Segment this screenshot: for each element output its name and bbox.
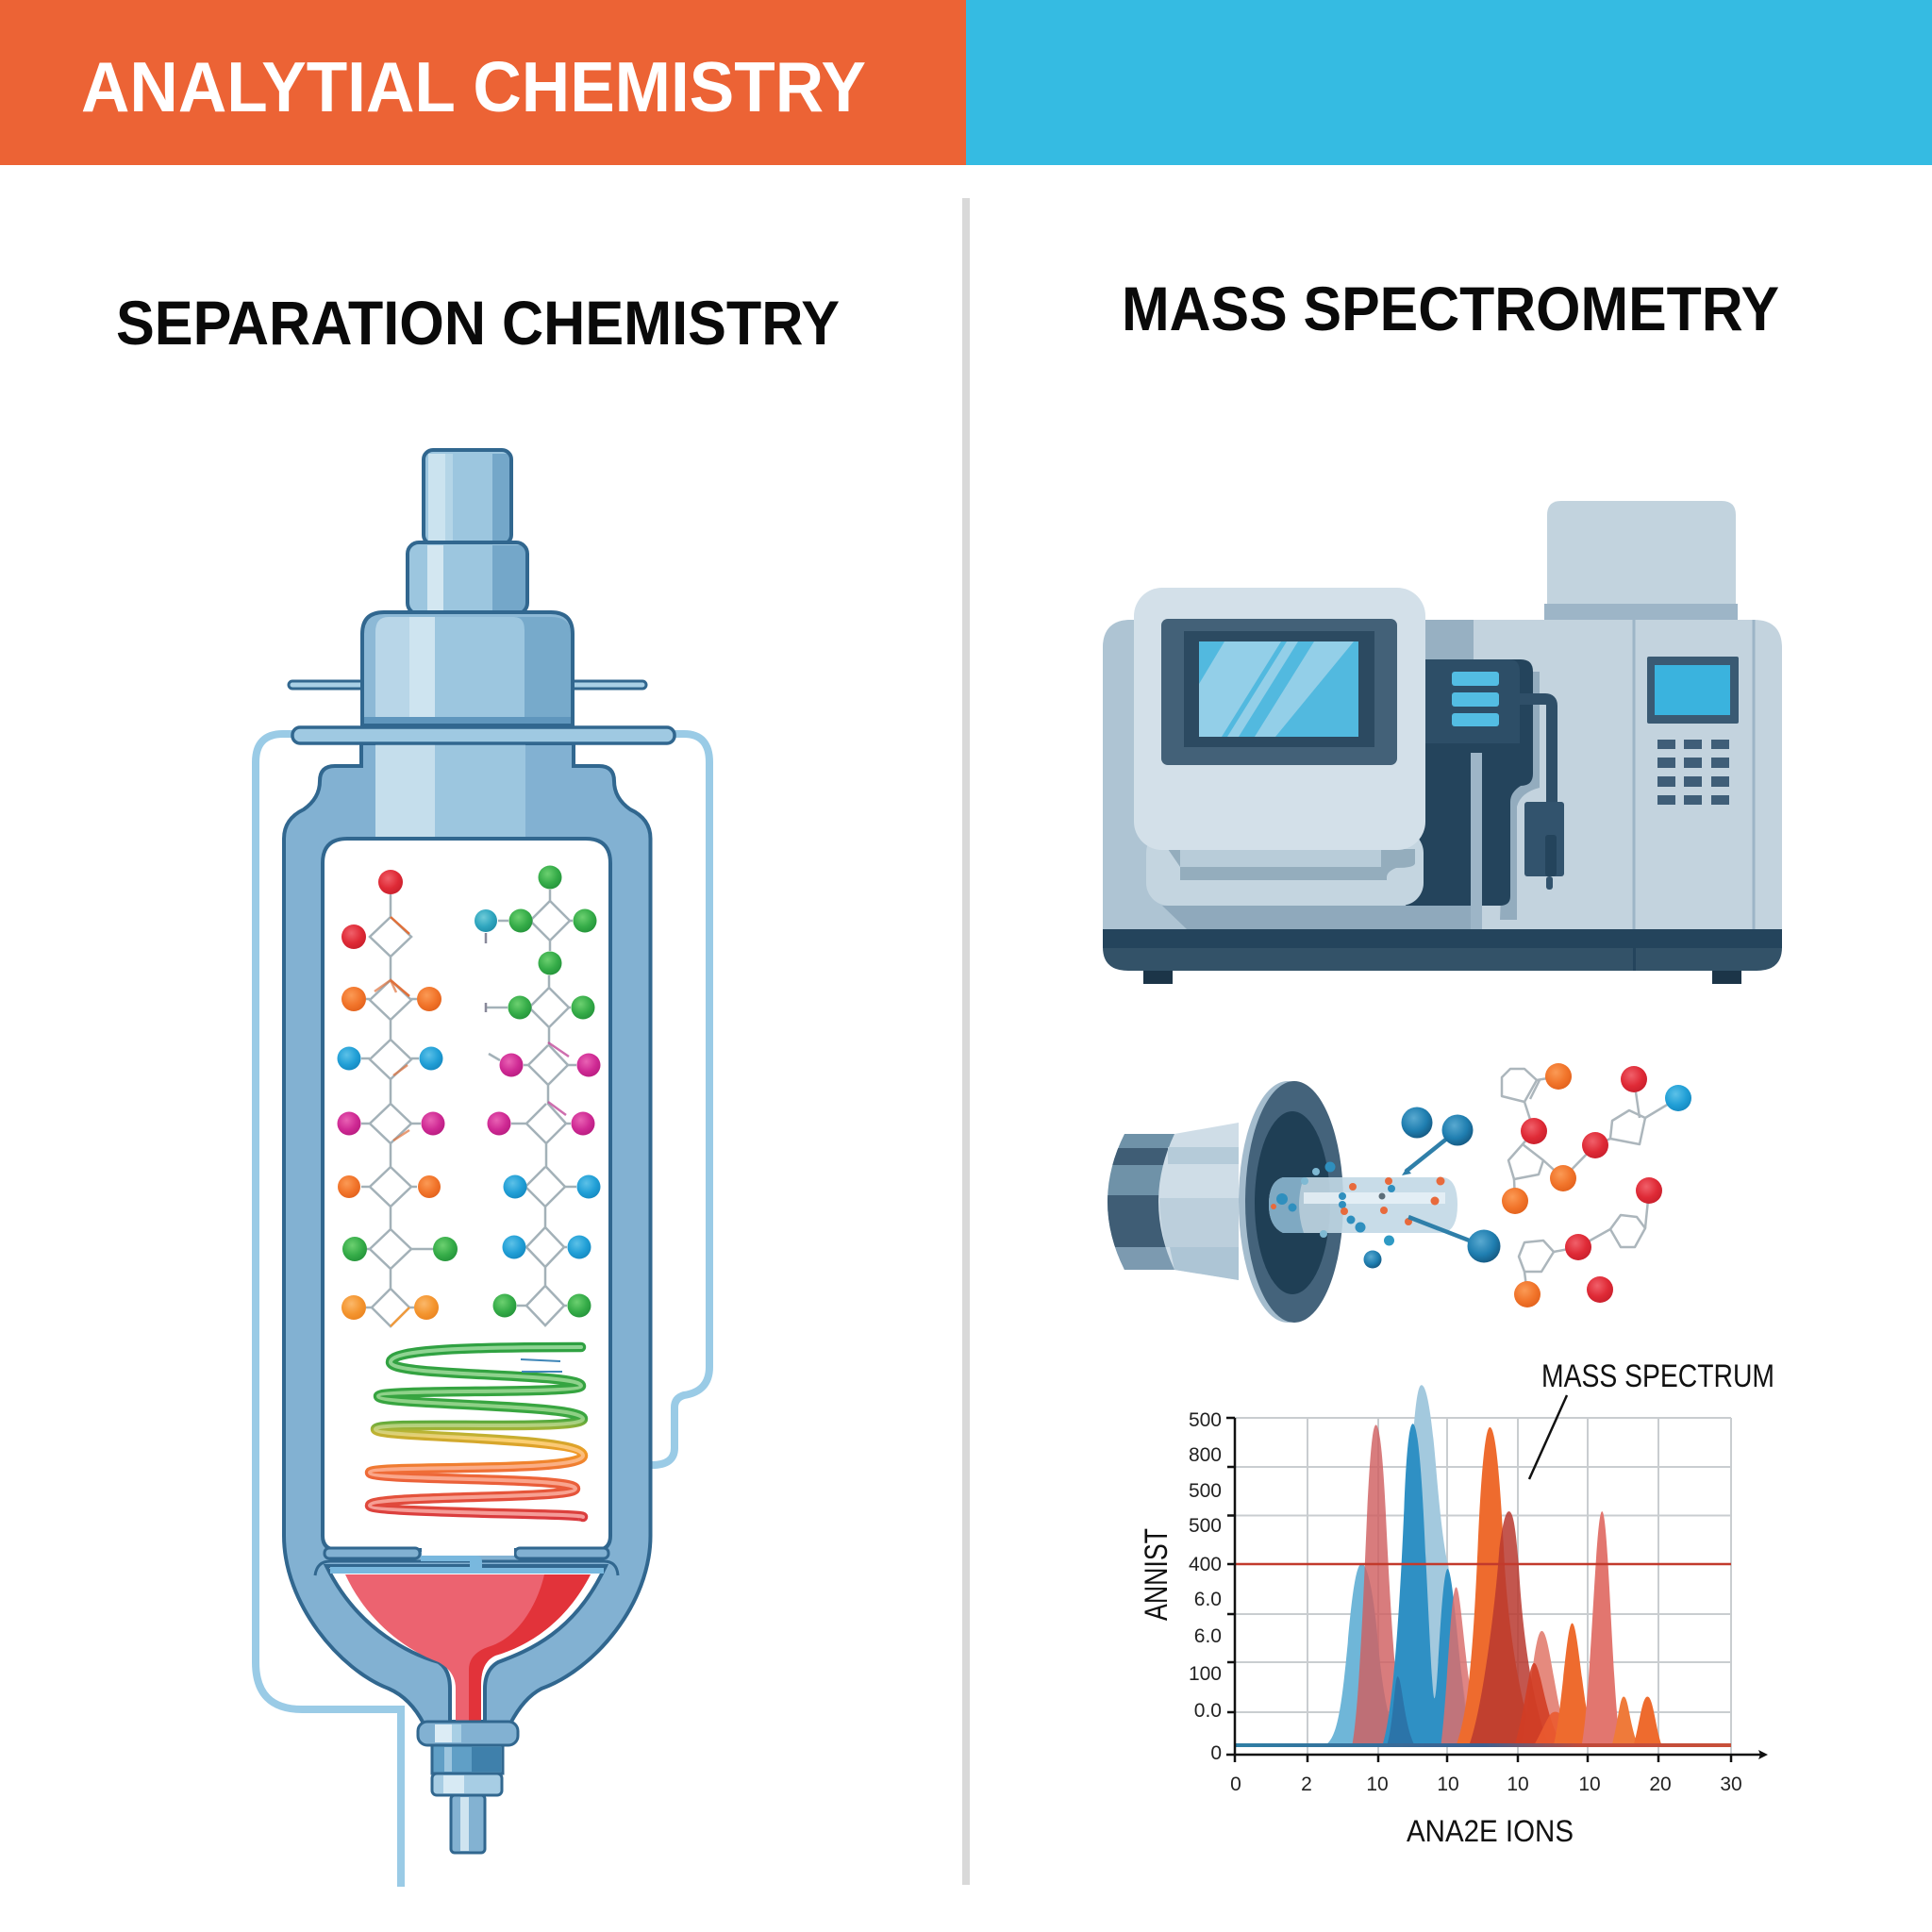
cone bbox=[1158, 1123, 1239, 1280]
red liquid bbox=[345, 1574, 591, 1722]
tray bbox=[1168, 849, 1415, 880]
neck highlights bbox=[375, 743, 525, 839]
baseline bbox=[1235, 1743, 1731, 1747]
x tick labels: 10 bbox=[1437, 1774, 1459, 1795]
right display bbox=[1647, 657, 1739, 724]
lower panel bbox=[1146, 830, 1424, 906]
chamber opening bbox=[422, 1548, 514, 1556]
ion tube bbox=[1269, 1177, 1457, 1233]
y tick labels: 800 bbox=[1189, 1444, 1222, 1466]
y tick labels: 0.0 bbox=[1194, 1700, 1222, 1722]
axis arrow bbox=[1758, 1750, 1768, 1759]
column body bbox=[284, 743, 651, 1724]
axes bbox=[1226, 1418, 1762, 1762]
molecule fragments bbox=[1502, 1063, 1691, 1307]
monitor screen bbox=[1199, 641, 1358, 737]
molecules: left column bbox=[338, 870, 458, 1326]
title: ANALYTIAL CHEMISTRY bbox=[81, 47, 866, 126]
x tick labels: 0 bbox=[1230, 1774, 1241, 1795]
top cap bbox=[424, 450, 511, 544]
collar bbox=[408, 542, 527, 614]
x tick labels: 10 bbox=[1366, 1774, 1389, 1795]
spectrum peaks bbox=[1324, 1385, 1662, 1745]
base divider bbox=[1633, 929, 1636, 971]
coil small marks bbox=[521, 1359, 562, 1372]
thin side arm bbox=[289, 681, 646, 689]
y tick labels: 500 bbox=[1189, 1480, 1222, 1502]
flange rear bbox=[1239, 1081, 1337, 1323]
machine body bbox=[1103, 620, 1782, 929]
x tick labels: 20 bbox=[1649, 1774, 1672, 1795]
x tick labels: 10 bbox=[1578, 1774, 1601, 1795]
distributor band bbox=[330, 1556, 604, 1574]
dark control unit bbox=[1406, 659, 1533, 906]
monitor bezel bbox=[1161, 619, 1397, 765]
y tick labels: 500 bbox=[1189, 1409, 1222, 1431]
y axis title: ANNIST bbox=[1139, 1528, 1174, 1621]
y tick labels: 500 bbox=[1189, 1515, 1222, 1537]
x tick labels bbox=[1230, 1774, 1742, 1795]
header bar: blue bbox=[966, 0, 1932, 165]
x tick labels: 2 bbox=[1301, 1774, 1312, 1795]
y tick labels: 0 bbox=[1210, 1742, 1222, 1764]
vertical strip bbox=[1471, 753, 1482, 929]
left shelf bbox=[325, 1548, 420, 1558]
flange front bbox=[1245, 1081, 1343, 1323]
header bar: orange bbox=[0, 0, 966, 165]
chart label pointer bbox=[1529, 1395, 1567, 1479]
large cap bbox=[362, 612, 573, 725]
screen reflections bbox=[1199, 641, 1354, 737]
molecules: right column bbox=[475, 866, 600, 1325]
handle bbox=[1524, 802, 1564, 890]
y tick labels: 400 bbox=[1189, 1554, 1222, 1575]
top box band bbox=[1544, 604, 1738, 620]
front panel bbox=[1134, 588, 1425, 850]
chart label: MASS SPECTRUM bbox=[1541, 1358, 1774, 1394]
x tick labels: 10 bbox=[1507, 1774, 1529, 1795]
x axis title: ANA2E IONS bbox=[1407, 1814, 1574, 1848]
flange bbox=[292, 727, 675, 743]
flange opening bbox=[1255, 1111, 1330, 1294]
left foot bbox=[1143, 971, 1173, 984]
right shelf bbox=[515, 1548, 608, 1558]
control panel face bbox=[1415, 659, 1520, 743]
machine base bbox=[1103, 929, 1782, 971]
side tubing bbox=[256, 734, 709, 1887]
control unit shadow bbox=[1500, 672, 1540, 920]
monitor inner bbox=[1184, 631, 1374, 747]
control buttons bbox=[1452, 672, 1499, 726]
ejected ions bbox=[1364, 1108, 1500, 1268]
bottom connector bbox=[418, 1722, 518, 1853]
inner chamber bbox=[323, 839, 610, 1550]
shadow beneath panel bbox=[1162, 906, 1474, 929]
basin lip bbox=[315, 1561, 618, 1575]
y tick labels: 100 bbox=[1189, 1663, 1222, 1685]
top box bbox=[1547, 501, 1736, 606]
grid bbox=[1235, 1418, 1731, 1755]
tube particles bbox=[1271, 1162, 1445, 1238]
base top band bbox=[1103, 929, 1782, 948]
red liquid shade bbox=[469, 1574, 591, 1722]
heading: separation chemistry: SEPARATION CHEMISTRY bbox=[116, 288, 840, 358]
center divider bbox=[962, 198, 970, 1885]
x tick labels: 30 bbox=[1720, 1774, 1742, 1795]
y tick labels bbox=[1189, 1409, 1222, 1764]
y tick labels: 6.0 bbox=[1194, 1589, 1222, 1610]
right display screen bbox=[1655, 665, 1730, 715]
right foot bbox=[1712, 971, 1741, 984]
hose bbox=[1520, 699, 1552, 804]
heading: mass spectrometry: MASS SPECTROMETRY bbox=[1122, 274, 1779, 343]
basin bbox=[326, 1566, 606, 1722]
body left shade bbox=[1103, 620, 1425, 929]
threshold line bbox=[1235, 1563, 1731, 1565]
chart: mass spectrum bbox=[1139, 1358, 1774, 1848]
panel: separation column bbox=[256, 450, 709, 1887]
keypad bbox=[1657, 740, 1729, 805]
panel: mass spectrometer instrument bbox=[1103, 501, 1782, 984]
back cylinder bbox=[1108, 1134, 1174, 1270]
y tick labels: 6.0 bbox=[1194, 1625, 1222, 1647]
body dividers bbox=[1634, 620, 1754, 929]
panel: ion source bbox=[1104, 1063, 1691, 1323]
separation coil bbox=[370, 1347, 583, 1517]
body mid shade bbox=[1425, 620, 1474, 929]
